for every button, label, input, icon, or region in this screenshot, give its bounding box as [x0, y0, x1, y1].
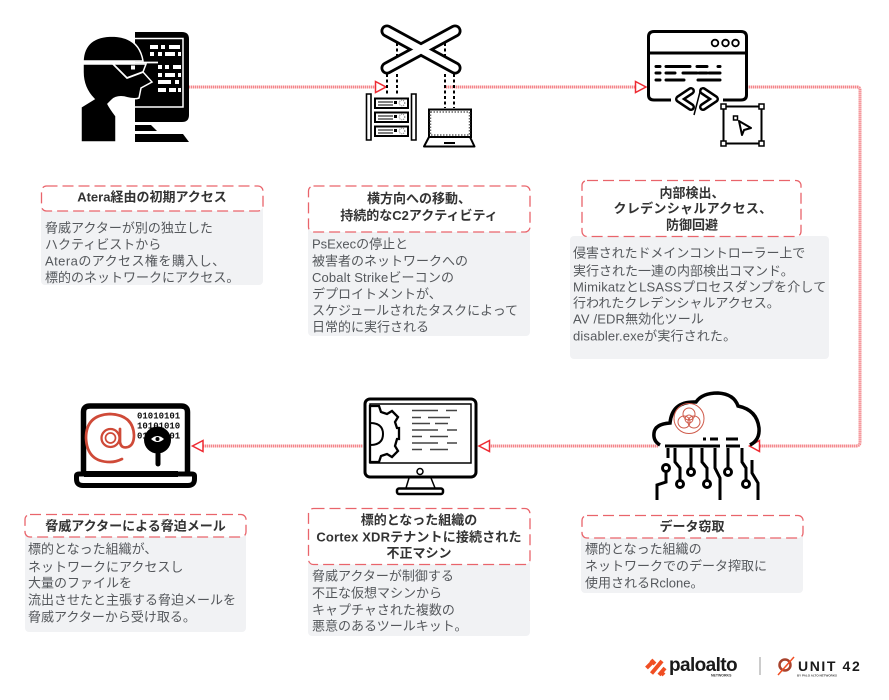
card: lateral movement: Cobalt Strikeビーコンの: [312, 270, 454, 285]
logo: Unit 42: UNIT 42: [798, 658, 861, 674]
card: extortion mail: 流出させたと主張する脅迫メールを: [28, 592, 236, 608]
card: rogue machine: 標的となった組織の: [361, 512, 477, 528]
icon: code window with cursor: [648, 32, 764, 146]
card: lateral movement: 横方向への移動、: [367, 191, 471, 206]
card: extortion mail: 大量のファイルを: [28, 576, 132, 590]
card: Atera initial access: 標的のネットワークにアクセス。: [45, 270, 239, 285]
card: discovery and credential access: 実行された一連の内部検出コマンド。: [573, 264, 794, 278]
icon: laptop with at sign and magnifier: 01010101: [137, 432, 181, 442]
card: data exfiltration: 標的となった組織の: [585, 542, 702, 556]
logo: Palo Alto Networks: paloalto: [669, 655, 737, 676]
card: lateral movement: 日常的に実行される: [312, 320, 429, 334]
card: discovery and credential access: AV /EDR無効化ツール: [573, 312, 704, 326]
card: rogue machine: 悪意のあるツールキット。: [312, 618, 467, 634]
card: rogue machine: キャプチャされた複数の: [312, 602, 455, 618]
card: rogue machine: 不正な仮想マシンから: [312, 586, 442, 600]
card: discovery and credential access: disabler.exeが実行された。: [573, 328, 736, 344]
card: lateral movement: デプロイトメントが、: [312, 286, 442, 302]
card: lateral movement: [308, 186, 530, 336]
icon: monitor with gear: [365, 399, 476, 494]
card: extortion mail: ネットワークにアクセスし: [28, 560, 183, 574]
card: Atera initial access: Atera経由の初期アクセス: [77, 190, 227, 204]
card: data exfiltration: 使用されるRclone。: [585, 576, 703, 590]
card: extortion mail: [25, 514, 246, 632]
flow connectors: [189, 82, 860, 452]
icon: hacker at computer: [81, 32, 189, 142]
card: Atera initial access: [41, 186, 263, 285]
card: rogue machine: 不正マシン: [386, 546, 452, 560]
card: rogue machine: Cortex XDRテナントに接続された: [316, 530, 522, 544]
card: discovery and credential access: MimikatzとLSASSプロセスダンプを介して: [573, 280, 826, 294]
card: lateral movement: 被害者のネットワークへの: [312, 254, 468, 268]
card: discovery and credential access: 侵害されたドメインコントローラー上で: [573, 246, 805, 260]
card: discovery and credential access: 防御回避: [666, 218, 718, 232]
card: extortion mail: 脅威アクターから受け取る。: [28, 610, 196, 624]
card: extortion mail: 脅威アクターによる脅迫メール: [45, 518, 226, 534]
logo: Unit 42: [760, 657, 861, 678]
card: data exfiltration: データ窃取: [659, 519, 725, 534]
card: Atera initial access: ハクティビストから: [45, 237, 161, 252]
card: rogue machine: 脅威アクターが制御する: [312, 568, 454, 584]
icon: network crossing with servers and laptop: [366, 31, 474, 146]
icon: laptop with at sign and magnifier: 01010101: [137, 412, 181, 422]
card: rogue machine: [308, 508, 530, 636]
card: lateral movement: スケジュールされたタスクによって: [312, 303, 518, 318]
card: extortion mail: 標的となった組織が、: [28, 542, 157, 556]
card: data exfiltration: ネットワークでのデータ搾取に: [585, 558, 767, 574]
card: Atera initial access: Ateraのアクセス権を購入し、: [45, 254, 226, 268]
card: Atera initial access: 脅威アクターが別の独立した: [45, 220, 213, 236]
card: lateral movement: 持続的なC2アクティビティ: [340, 208, 498, 223]
card: data exfiltration: [581, 516, 803, 593]
card: discovery and credential access: クレデンシャルアクセス、: [614, 201, 772, 216]
logo: Unit 42: BY PALO ALTO NETWORKS: [797, 674, 837, 678]
icon: cloud with biohazard and circuit: [654, 393, 759, 500]
card: discovery and credential access: [570, 180, 829, 359]
card: lateral movement: PsExecの停止と: [312, 236, 408, 252]
icon: laptop with at sign and magnifier: [76, 406, 194, 486]
card: discovery and credential access: 内部検出、: [659, 186, 725, 200]
card: discovery and credential access: 行われたクレデンシャルアクセス。: [573, 296, 780, 310]
icon: laptop with at sign and magnifier: 10101010: [137, 422, 180, 432]
logo: Palo Alto Networks: NETWORKS: [711, 674, 732, 678]
